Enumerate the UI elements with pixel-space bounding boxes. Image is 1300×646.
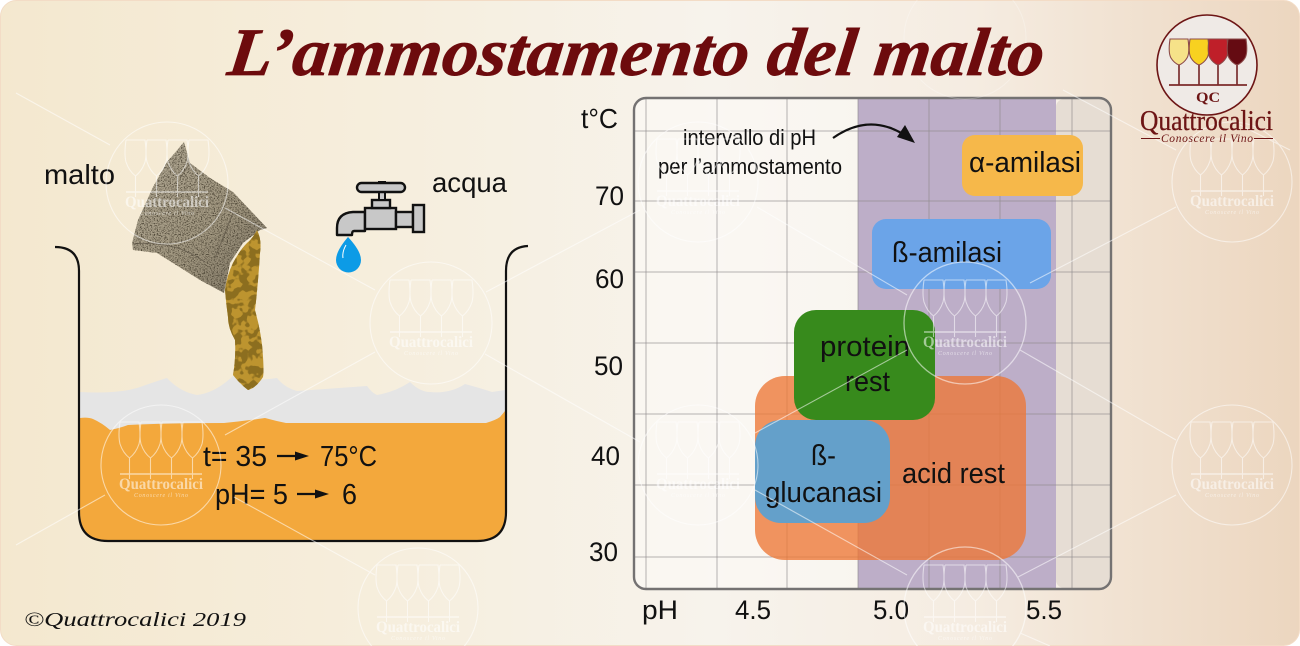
watermark 1: Conoscere il Vino bbox=[140, 211, 194, 217]
y axis labels: 60 bbox=[595, 264, 624, 294]
pH text bbox=[215, 479, 357, 511]
x axis labels: 4.5 bbox=[735, 595, 771, 625]
box: acid rest bbox=[755, 376, 1026, 560]
box: protein rest bbox=[794, 310, 935, 420]
icon: malt grain stream bbox=[225, 230, 264, 390]
pH text: 6 bbox=[342, 479, 357, 511]
icon: malt sack bbox=[132, 142, 267, 293]
mash pH interval band bbox=[858, 99, 1056, 588]
x axis labels: 5.0 bbox=[873, 595, 909, 625]
illustration: mash pot bbox=[55, 246, 528, 541]
note: pH interval bbox=[658, 125, 842, 179]
arrow: to pH interval bbox=[833, 124, 915, 143]
watermark 2 bbox=[370, 262, 492, 384]
label: acqua: acqua bbox=[432, 167, 507, 198]
box: beta-glucanasi: glucanasi bbox=[765, 477, 882, 509]
y axis labels: 40 bbox=[591, 441, 620, 471]
watermark 6: Conoscere il Vino bbox=[671, 493, 725, 499]
chart frame bbox=[634, 98, 1111, 589]
watermark 1 bbox=[106, 122, 228, 244]
logo QC: QC bbox=[1196, 90, 1220, 106]
watermark 8: Conoscere il Vino bbox=[938, 636, 992, 642]
foam layer bbox=[80, 376, 505, 430]
watermark 9 bbox=[1172, 122, 1292, 242]
box: acid rest: acid rest bbox=[902, 458, 1005, 490]
temperature text: t= 35 bbox=[203, 441, 267, 473]
x axis labels: pH bbox=[642, 595, 678, 625]
watermark 3 bbox=[101, 405, 221, 525]
liquid bbox=[80, 411, 505, 541]
y axis labels: 50 bbox=[594, 351, 623, 381]
box: beta-amilasi bbox=[872, 219, 1051, 289]
watermark 6: Quattrocalici bbox=[656, 476, 741, 493]
watermark 10 bbox=[1172, 405, 1292, 525]
watermark 3: Quattrocalici bbox=[119, 476, 204, 493]
y axis labels bbox=[581, 103, 624, 567]
chart: temperature versus pH bbox=[581, 98, 1111, 625]
logo: Quattrocalici bbox=[1140, 15, 1273, 145]
watermark 7: Conoscere il Vino bbox=[938, 351, 992, 357]
box: beta-glucanasi bbox=[755, 420, 890, 523]
watermark 10: Conoscere il Vino bbox=[1205, 493, 1259, 499]
watermark 2: Conoscere il Vino bbox=[404, 351, 458, 357]
watermark 6 bbox=[638, 405, 758, 525]
box: alpha-amilasi bbox=[962, 135, 1083, 196]
box: beta-amilasi: ß-amilasi bbox=[892, 237, 1002, 269]
watermark 8: Quattrocalici bbox=[923, 619, 1008, 636]
watermark 1: Quattrocalici bbox=[125, 194, 210, 211]
y axis labels: 70 bbox=[595, 181, 624, 211]
watermark 4 bbox=[358, 548, 478, 646]
logo name: Quattrocalici bbox=[1140, 106, 1273, 137]
note: pH interval: per l’ammostamento bbox=[658, 154, 842, 179]
note: pH interval: intervallo di pH bbox=[683, 125, 816, 150]
watermark 9: Conoscere il Vino bbox=[1205, 210, 1259, 216]
chart plot background bbox=[634, 98, 1111, 589]
watermark 7: Quattrocalici bbox=[923, 334, 1008, 351]
watermark 5 bbox=[638, 122, 758, 242]
watermark 8 bbox=[904, 547, 1026, 646]
watermark 2: Quattrocalici bbox=[389, 334, 474, 351]
y axis labels: t°C bbox=[581, 103, 618, 134]
watermark 5: Quattrocalici bbox=[656, 193, 741, 210]
x axis labels bbox=[642, 595, 1062, 625]
box: protein rest: protein bbox=[820, 331, 910, 363]
watermark 9: Quattrocalici bbox=[1190, 193, 1275, 210]
water drop bbox=[336, 237, 361, 272]
box: beta-glucanasi: ß- bbox=[811, 440, 836, 472]
icon: water tap bbox=[336, 182, 424, 272]
watermark 4: Quattrocalici bbox=[376, 619, 461, 636]
watermark top arc bbox=[904, 0, 1026, 99]
title: L’ammostamento del malto bbox=[223, 14, 1049, 90]
logo circle bbox=[1157, 15, 1257, 115]
y axis labels: 30 bbox=[589, 537, 618, 567]
pot outline bbox=[55, 246, 528, 541]
watermark 10: Quattrocalici bbox=[1190, 476, 1275, 493]
logo tagline: Conoscere il Vino bbox=[1161, 133, 1253, 145]
x axis labels: 5.5 bbox=[1026, 595, 1062, 625]
temperature text: 75°C bbox=[320, 441, 377, 473]
box: protein rest: rest bbox=[845, 366, 890, 398]
logo wine glasses bbox=[1169, 39, 1247, 85]
copyright: ©Quattrocalici 2019 bbox=[24, 609, 246, 631]
watermark 5: Conoscere il Vino bbox=[671, 210, 725, 216]
watermark 7 bbox=[904, 262, 1026, 384]
watermark 4: Conoscere il Vino bbox=[391, 636, 445, 642]
box: alpha-amilasi: α-amilasi bbox=[969, 147, 1081, 179]
label: malto: malto bbox=[44, 159, 115, 190]
temperature text bbox=[203, 441, 377, 473]
pH text: pH= 5 bbox=[215, 479, 288, 511]
watermark 3: Conoscere il Vino bbox=[134, 493, 188, 499]
